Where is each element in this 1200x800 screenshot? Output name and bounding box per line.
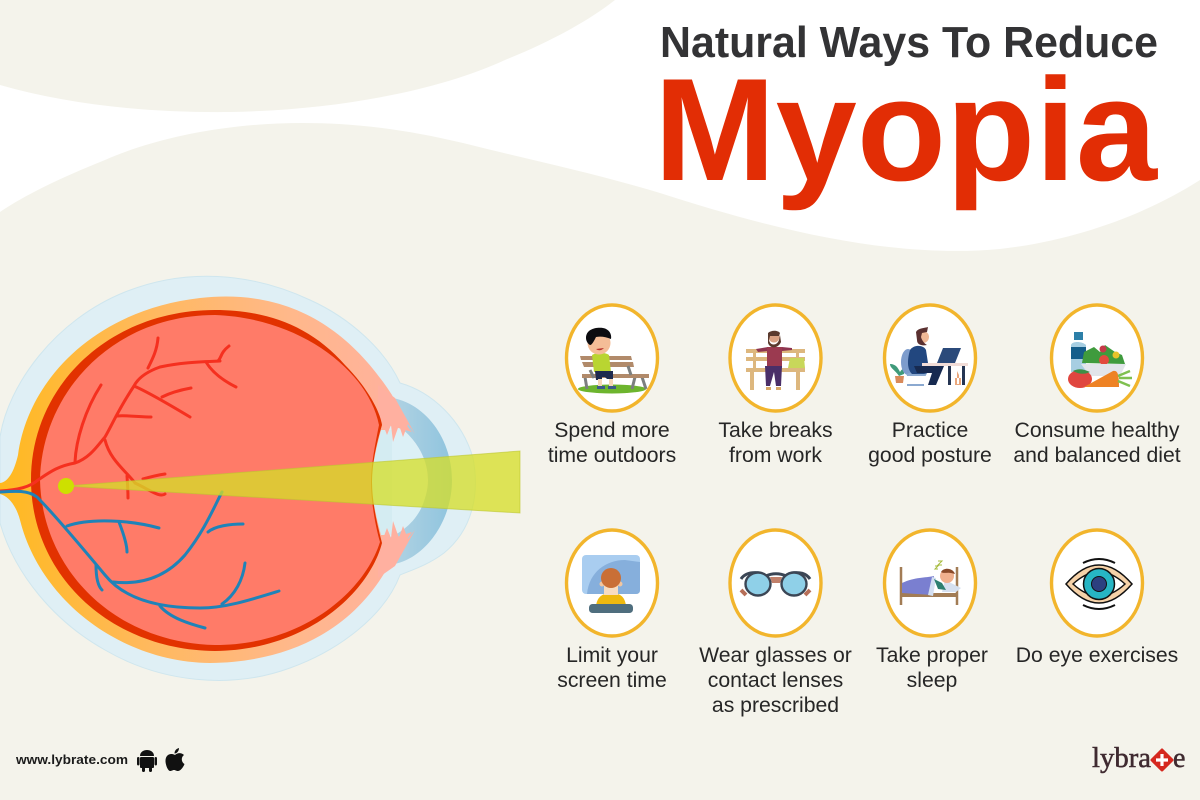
red artery (0, 338, 236, 498)
lens chamber cover (372, 430, 392, 535)
icon: person sleeping (901, 561, 961, 605)
label: Do eye exercises (1016, 644, 1178, 667)
label: Wear glasses or (699, 644, 852, 667)
label: Practice (892, 419, 968, 442)
label: sleep (907, 669, 957, 692)
focus point (58, 478, 74, 494)
circle frame (730, 305, 821, 411)
icon: child at screen (582, 555, 640, 613)
tip: wear glasses (730, 530, 821, 636)
label: Take proper (876, 644, 988, 667)
circle frame (884, 530, 976, 636)
label: time outdoors (548, 444, 676, 467)
logo: lybrate: lybra (1092, 743, 1152, 774)
vitreous body (40, 315, 380, 645)
label: as prescribed (712, 694, 839, 717)
ciliary muscle bottom (378, 521, 415, 578)
eye outer layer (0, 276, 475, 680)
tip: take breaks from work (730, 305, 821, 411)
icon: food and bottle (1068, 332, 1132, 388)
label: Consume healthy (1015, 419, 1180, 442)
circle frame (884, 305, 976, 411)
choroid red layer (31, 310, 382, 651)
icon: boy on bench (578, 328, 649, 394)
icon: apple (166, 748, 184, 771)
lens chamber (372, 420, 427, 540)
label: screen time (557, 669, 667, 692)
tip: limit screen time (566, 530, 658, 636)
tip: consume healthy diet (1052, 305, 1142, 411)
icon: eye (1066, 559, 1132, 609)
cornea (378, 397, 452, 565)
tip: take proper sleep (884, 530, 976, 636)
label: from work (729, 444, 822, 467)
label: good posture (868, 444, 992, 467)
label: and balanced diet (1013, 444, 1181, 467)
logo: lybrate: e (1173, 743, 1185, 774)
circle frame (730, 530, 821, 636)
icon: android (137, 750, 157, 772)
title: Myopia: Myopia (654, 48, 1159, 211)
circle frame (1052, 530, 1142, 636)
label: Spend more (554, 419, 670, 442)
blue vein (0, 491, 279, 628)
icon: glasses (741, 572, 810, 596)
icon: man on bench (746, 331, 805, 390)
optic nerve and sclera (0, 297, 412, 663)
tip: practice good posture (884, 305, 976, 411)
light beam (66, 451, 520, 513)
eye diagram (0, 276, 520, 680)
footer url: www.lybrate.com (15, 752, 128, 767)
circle frame (566, 305, 658, 411)
label: Take breaks (718, 419, 833, 442)
logo: lybrate (1092, 743, 1185, 774)
label: Limit your (566, 644, 658, 667)
circle frame (566, 530, 658, 636)
ciliary muscle top (378, 385, 415, 442)
tip: spend more time outdoors (566, 305, 658, 411)
lens rim (372, 420, 390, 540)
label: contact lenses (708, 669, 843, 692)
icon: man at laptop (890, 327, 968, 385)
title: Natural Ways To Reduce: Natural Ways To Reduce (660, 18, 1158, 67)
circle frame (1052, 305, 1142, 411)
tip: do eye exercises (1052, 530, 1142, 636)
